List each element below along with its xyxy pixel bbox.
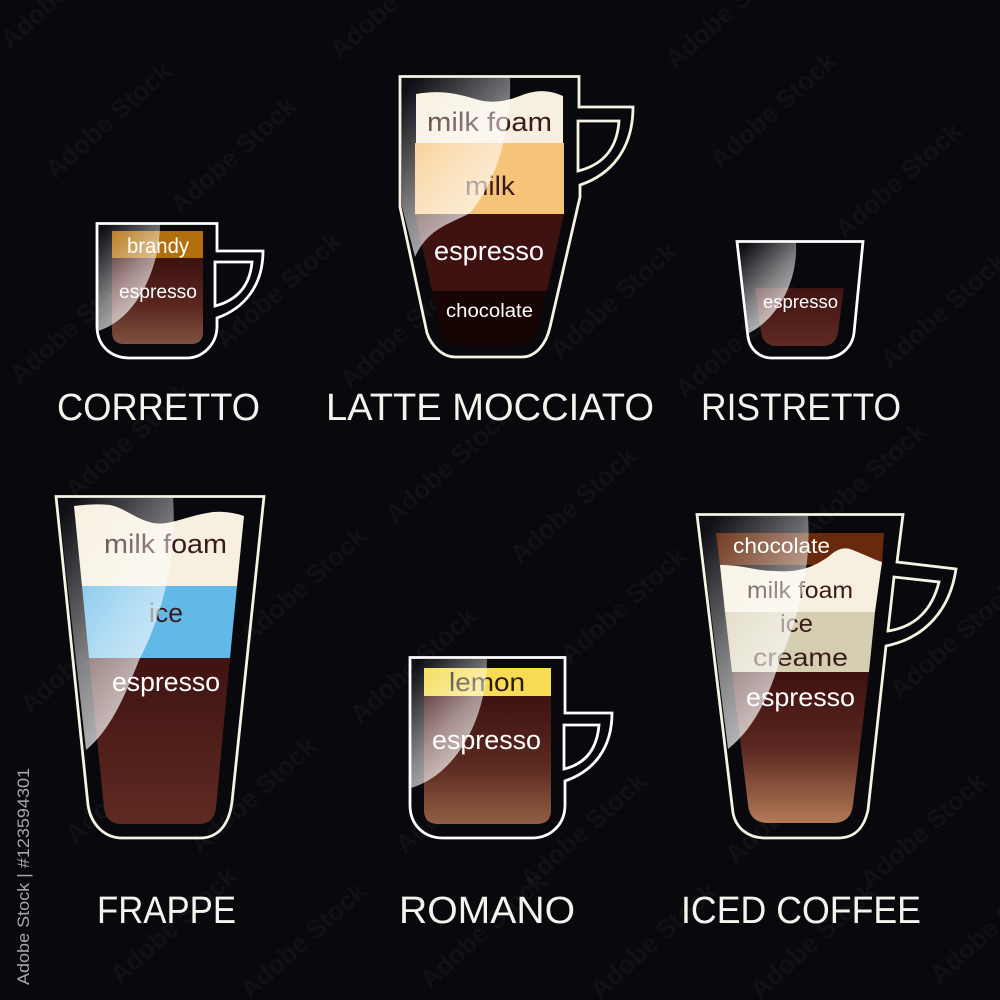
title: romano: ROMANO — [399, 890, 575, 932]
label: milk foam: milk foam — [747, 577, 853, 603]
layer: lemon — [424, 668, 551, 696]
glass highlight — [699, 516, 809, 749]
label: milk foam: milk foam — [104, 529, 227, 559]
label: chocolate: chocolate — [446, 301, 533, 322]
label: espresso: espresso — [119, 282, 197, 303]
layer: espresso — [424, 696, 551, 824]
watermark pattern: Adobe Stock — [554, 540, 693, 669]
layer: milk foam — [720, 548, 882, 612]
glass highlight — [411, 659, 487, 788]
cup: iced coffee — [697, 514, 956, 838]
title: latte mocciato: LATTE MOCCIATO — [326, 387, 654, 429]
label: ice: ice — [149, 598, 183, 628]
handle inner outline — [215, 262, 252, 306]
watermark pattern: Adobe Stock — [669, 275, 808, 404]
label: espresso: espresso — [432, 725, 541, 755]
cup outline — [97, 224, 263, 358]
layer: milk foam — [74, 504, 244, 586]
watermark pattern: Adobe Stock — [504, 440, 643, 569]
handle inner outline — [564, 725, 599, 769]
watermark pattern: Adobe Stock — [414, 865, 553, 994]
label: chocolate: chocolate — [733, 535, 830, 558]
title: ristretto: RISTRETTO — [701, 387, 901, 429]
cup: ristretto — [737, 242, 863, 358]
cup: corretto — [97, 224, 263, 358]
glass highlight — [98, 224, 160, 331]
watermark pattern: Adobe Stock — [854, 765, 993, 894]
label: espresso: espresso — [112, 667, 220, 697]
watermark pattern: Adobe Stock — [59, 375, 198, 504]
layer: milk foam — [416, 91, 563, 143]
layer: chocolate — [432, 291, 547, 345]
watermark pattern: Adobe Stock — [829, 115, 968, 244]
handle inner outline — [888, 577, 939, 631]
watermark pattern: Adobe Stock — [379, 400, 518, 529]
cup outline — [737, 242, 863, 358]
watermark pattern: Adobe Stock — [334, 265, 473, 394]
label: milk: milk — [465, 171, 516, 201]
watermark pattern: Adobe Stock — [344, 600, 483, 729]
layer: chocolate — [716, 533, 884, 565]
layer: espresso — [732, 672, 869, 823]
watermark pattern: Adobe Stock — [4, 260, 143, 389]
watermark pattern: Adobe Stock — [184, 730, 323, 859]
cup outline — [400, 76, 633, 357]
cup outline — [697, 514, 956, 838]
label: ice creame: creame — [753, 644, 848, 672]
stock id text: Adobe Stock | #123594301 — [14, 768, 33, 985]
label: ice creame — [753, 610, 848, 672]
label: espresso: espresso — [763, 292, 838, 312]
label: espresso: espresso — [434, 236, 544, 266]
watermark pattern: Adobe Stock — [164, 90, 303, 219]
label: ice creame: ice — [780, 610, 813, 638]
layer: espresso — [415, 214, 564, 291]
layer: ice — [82, 586, 237, 658]
glass highlight — [58, 498, 174, 750]
title: frappe: FRAPPE — [97, 890, 236, 932]
layer: espresso — [112, 258, 203, 344]
glass highlight — [401, 78, 510, 257]
layer: ice creame — [725, 612, 875, 672]
watermark pattern: Adobe Stock — [389, 730, 528, 859]
watermark pattern: Adobe Stock — [704, 45, 843, 174]
cup: romano — [410, 658, 612, 838]
watermark pattern: Adobe Stock — [719, 740, 858, 869]
layer: brandy — [112, 231, 203, 258]
watermark pattern: Adobe Stock — [14, 590, 153, 719]
cup outline — [410, 658, 612, 838]
watermark pattern: Adobe Stock — [514, 765, 653, 894]
cup outline — [56, 496, 264, 838]
watermark pattern: Adobe Stock — [39, 55, 178, 184]
layer: milk — [415, 143, 564, 214]
watermark pattern: Adobe Stock — [104, 860, 243, 989]
watermark pattern: Adobe Stock — [209, 225, 348, 354]
title: corretto: CORRETTO — [57, 387, 260, 429]
title: iced coffee: ICED COFFEE — [681, 890, 921, 932]
watermark pattern: Adobe Stock — [544, 235, 683, 364]
label: lemon: lemon — [449, 667, 525, 697]
watermark pattern: Adobe Stock — [59, 720, 198, 849]
label: espresso: espresso — [746, 682, 855, 712]
watermark pattern: Adobe Stock — [794, 415, 933, 544]
layer: espresso — [89, 658, 230, 824]
cup: frappe — [56, 496, 264, 838]
cup: latte mocciato — [400, 76, 633, 357]
label: brandy: brandy — [127, 235, 189, 258]
layer: espresso — [755, 288, 844, 346]
glass highlight — [739, 243, 796, 333]
label: milk foam: milk foam — [427, 107, 552, 137]
handle inner outline — [578, 121, 619, 171]
watermark pattern: Adobe Stock — [234, 520, 373, 649]
